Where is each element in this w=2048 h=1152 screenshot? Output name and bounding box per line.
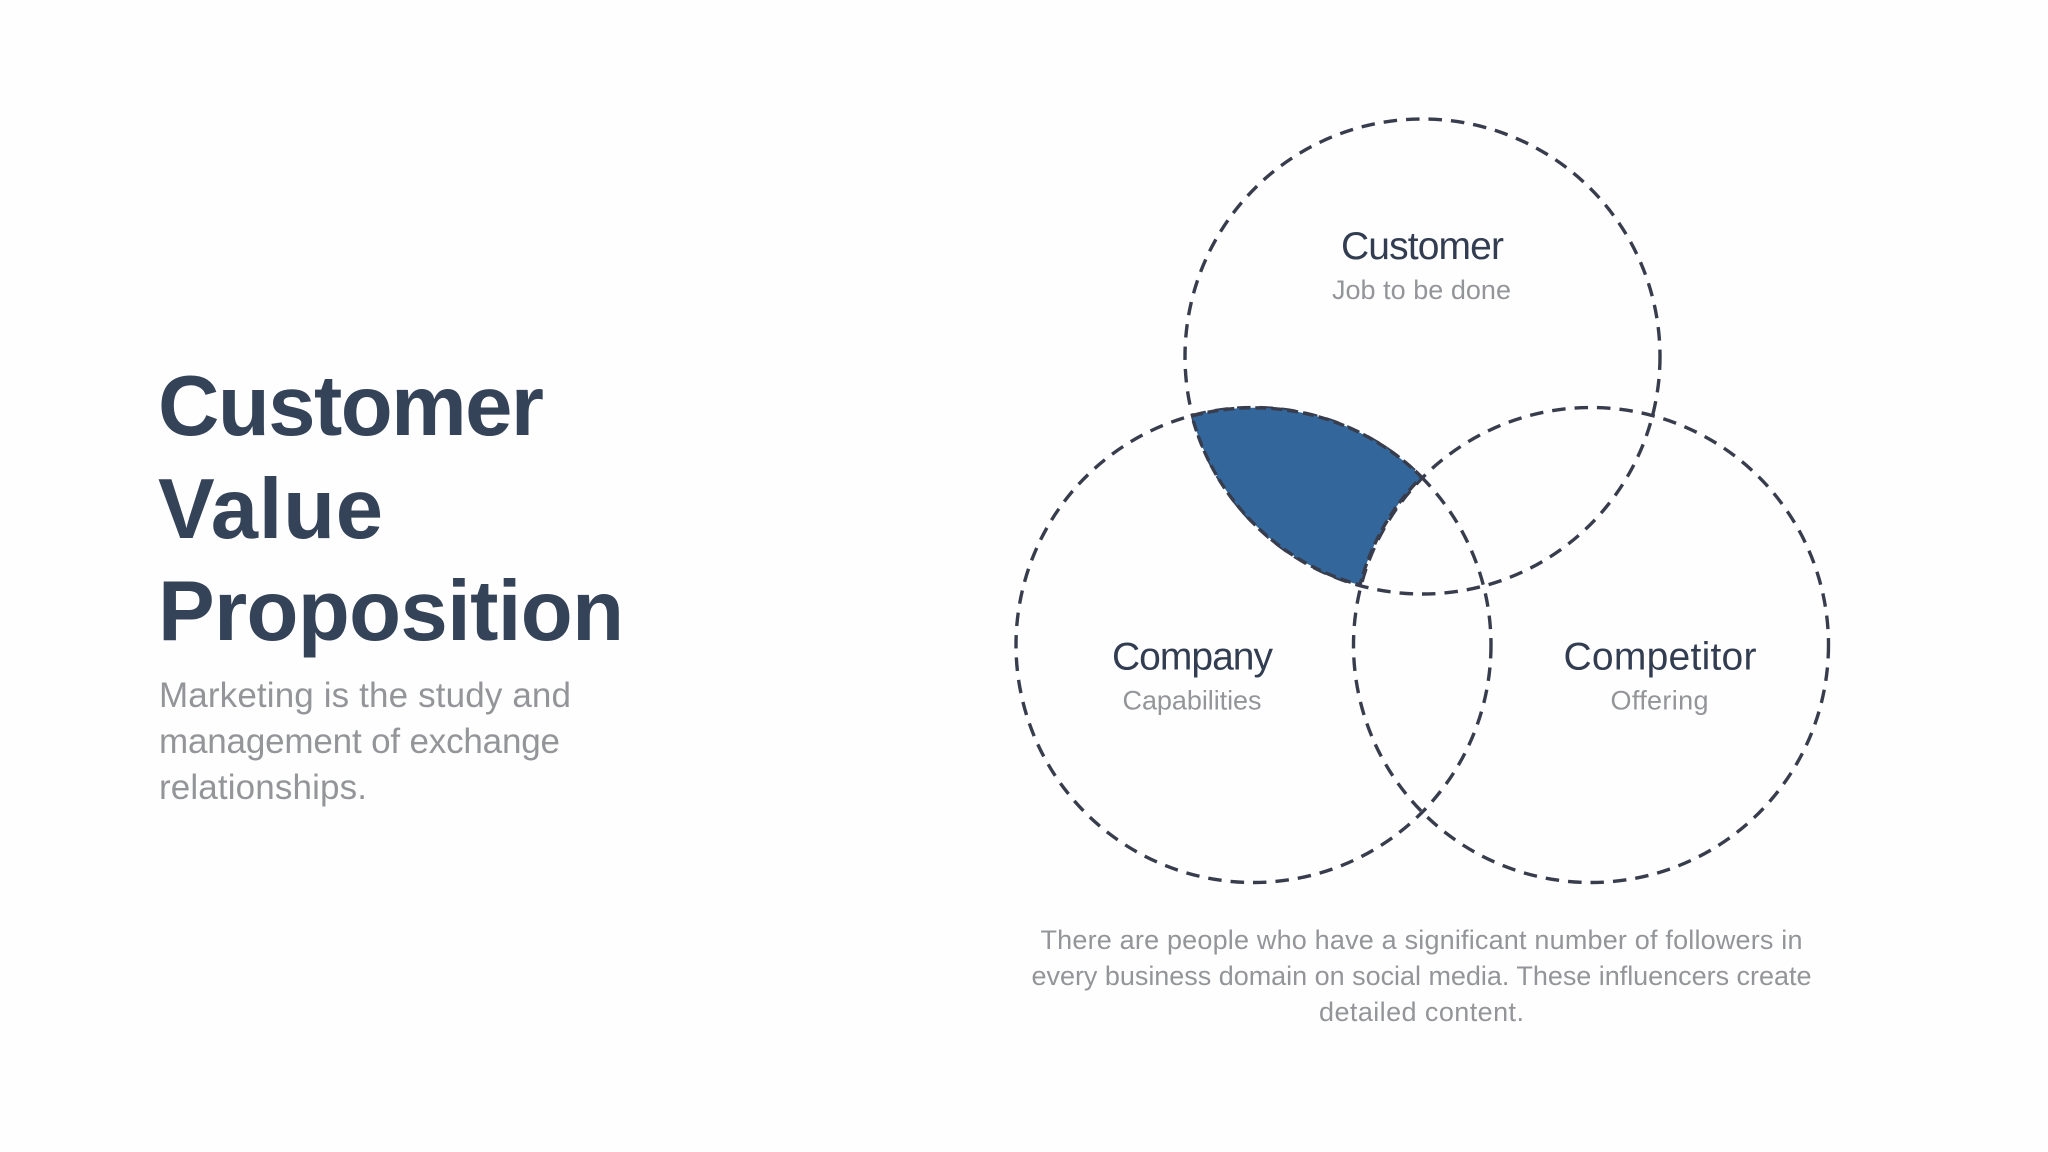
label: company: Capabilities: [1122, 686, 1262, 716]
venn diagram: [1016, 119, 1828, 882]
subtitle text: relationships.: [159, 768, 367, 807]
label: competitor: Offering: [1610, 686, 1708, 716]
label: company: Company: [1112, 636, 1274, 678]
highlighted overlap: customer and company: [1192, 408, 1422, 585]
circle: company: [1016, 408, 1491, 882]
circle: competitor: [1354, 408, 1828, 882]
title: Value: [158, 462, 383, 557]
subtitle text: [159, 676, 571, 807]
label: competitor: [1564, 636, 1756, 716]
label: company: [1112, 636, 1274, 716]
title: [158, 359, 624, 659]
subtitle text: Marketing is the study and: [159, 676, 571, 715]
label: customer: Customer: [1341, 225, 1504, 268]
label: customer: Job to be done: [1332, 275, 1511, 305]
caption text: every business domain on social media. These influencers create: [1032, 961, 1812, 991]
subtitle text: management of exchange: [159, 722, 560, 761]
label: competitor: Competitor: [1564, 636, 1756, 678]
caption text: There are people who have a significant number of followers in: [1040, 925, 1802, 955]
circle: customer: [1185, 119, 1660, 594]
title: Customer: [158, 359, 544, 454]
caption text: [1032, 925, 1812, 1027]
label: customer: [1332, 225, 1511, 305]
caption text: detailed content.: [1319, 997, 1524, 1027]
title: Proposition: [158, 564, 624, 659]
